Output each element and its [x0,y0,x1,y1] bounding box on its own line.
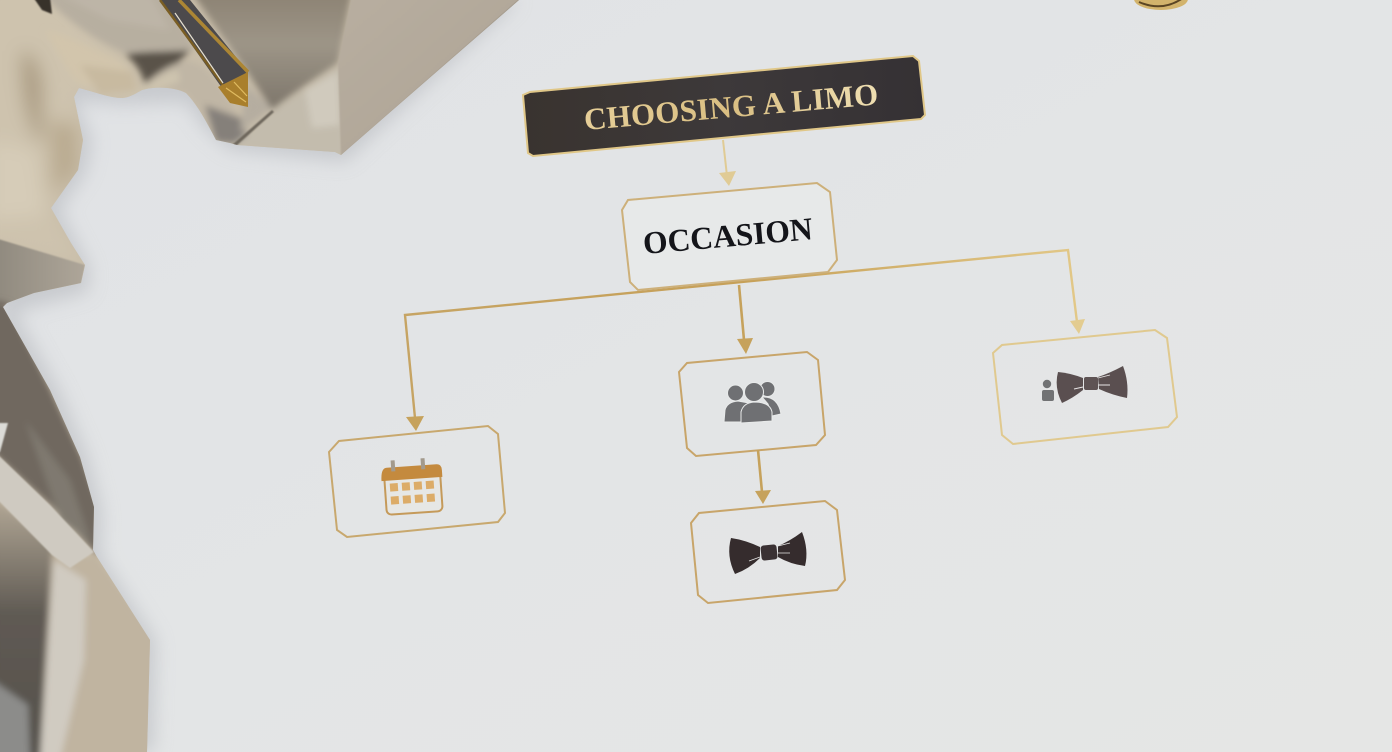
upper taupe fold [50,0,192,52]
tan and dark lower folds [0,495,54,752]
satin fabric drape [0,0,530,752]
icon: bow tie grey [1057,366,1128,403]
occasion text: OCCASION [641,210,814,261]
icon: group of people [724,382,781,423]
lower fold [156,60,225,106]
gold ring, top right [1134,0,1188,10]
connector: group to bow tie [755,450,771,504]
arrow: to calendar [406,416,424,431]
title plate [523,56,925,156]
connector: branching line [405,250,1085,431]
grey wedge [0,238,85,306]
icon: calendar [380,457,445,515]
tan right fold [40,552,156,752]
right flap [338,0,525,158]
dark hollow [125,50,190,84]
connector: occasion to group [739,285,744,340]
box: group [679,352,825,456]
icon: bow tie [729,532,806,574]
box: bow tie [691,501,845,603]
box: occasion [622,183,837,290]
arrow: title to occasion [719,140,736,186]
icon: small person [1042,380,1054,401]
light triangle fold [234,132,254,146]
pale diagonal fold [0,452,94,568]
arrow: to bow tie with person [1070,319,1085,334]
gold pen clip on fabric [160,0,248,107]
grey lower band [0,300,100,556]
grey centre fold [190,0,352,110]
arrow: to group [737,338,753,354]
box: bow tie with person [993,330,1177,444]
title text: CHOOSING A LIMO [583,76,879,137]
fabric shadow [0,0,519,752]
cream main fold [0,0,130,265]
box: calendar [329,426,505,537]
